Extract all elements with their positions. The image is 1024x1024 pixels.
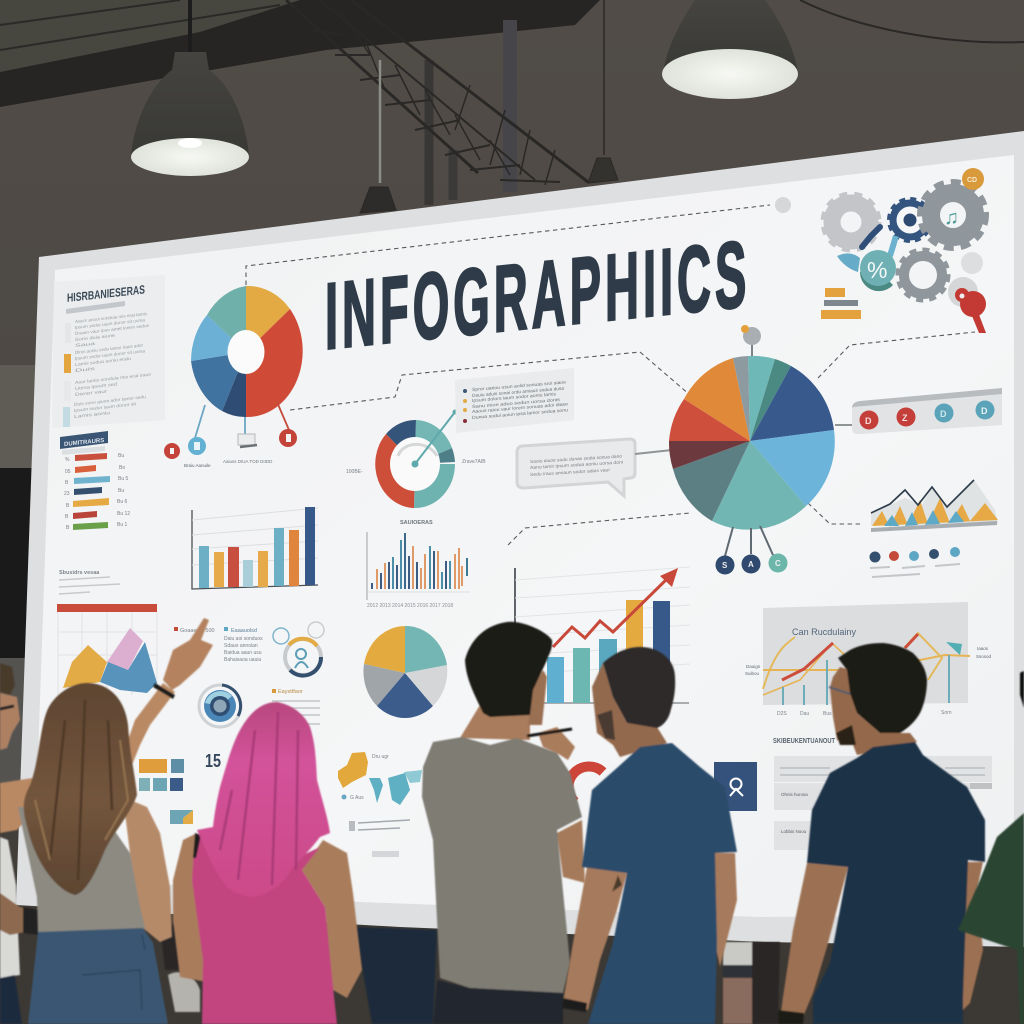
- list labels: Bu 1: [117, 522, 128, 528]
- speech bubble: Saoiu aiuoe sodu dunas sedia sonua dario: [530, 453, 623, 464]
- glasses: [829, 687, 850, 694]
- icon strip: D: [940, 409, 947, 419]
- watch: [562, 998, 587, 1012]
- donut chart center: Zrave7AIB: [462, 459, 486, 465]
- ceiling: [0, 0, 600, 107]
- hair: [603, 647, 675, 728]
- list bars: [73, 453, 110, 530]
- person: woman with pink hair: [173, 702, 362, 1024]
- body copy: Doaun vaur ipso amet lorem sedus: [75, 323, 150, 336]
- forearm: [557, 820, 585, 883]
- icon strip: [835, 388, 1002, 434]
- line chart panel: Can Rucdulainy: [792, 627, 856, 638]
- donut chart center: [346, 410, 486, 508]
- body copy: Aasor anoui sonduia mis erat lamis: [75, 311, 148, 324]
- note panel: [455, 368, 574, 433]
- body copy: Dirus aoniu sedu lamor iraus ador: [75, 342, 144, 355]
- panel heading: HISRBANIESERAS: [67, 282, 145, 305]
- line chart panel: Iaaos: [977, 646, 989, 651]
- body copy: Ipsum sedor iaum donor sit uorsa: [75, 317, 146, 330]
- percent badge: %: [867, 257, 887, 283]
- face: [528, 670, 547, 725]
- list labels: %: [65, 457, 70, 463]
- strap: [193, 833, 201, 858]
- person: man in grey t-shirt: [422, 622, 585, 1024]
- world map: Dru ugr: [372, 754, 389, 760]
- note panel: Dunua sodui aoiun ipsa lamor sedua sonu: [472, 407, 569, 420]
- bar chart: [192, 507, 318, 589]
- list labels: Bu: [118, 453, 124, 459]
- gold badge: [962, 168, 984, 190]
- jeans: [433, 980, 563, 1024]
- gear: navy: [889, 199, 931, 241]
- gear: light grey: [823, 194, 879, 250]
- speech bubble: [517, 439, 672, 496]
- world map: G Aus: [350, 795, 364, 801]
- bottom right table: Lobbis Noou: [781, 829, 807, 834]
- note panel: Dauiu aduis sonai ordu amiaus sodua dusa: [472, 386, 565, 398]
- beard: [597, 710, 615, 740]
- column chart: 2012 2013 2014 2015 2016 2017 2018: [367, 603, 453, 609]
- bottom pie chart: [363, 626, 447, 718]
- percent badge: [837, 227, 896, 291]
- person: woman with brown hair: [0, 618, 213, 1024]
- neck: [460, 700, 530, 740]
- list labels: Bu 12: [117, 511, 130, 517]
- body copy: Ipsum sedor iaum donor sit: [74, 401, 137, 413]
- ceiling truss: [286, 0, 1024, 213]
- list labels: 23: [64, 491, 70, 497]
- note panel: Ipsum dolors iaum sodor aoniu lamis: [472, 391, 557, 403]
- area sparkline chart: [870, 480, 998, 577]
- body copy: [74, 311, 152, 419]
- face and neck: [830, 667, 917, 755]
- line chart panel: Bus: [823, 711, 832, 717]
- list labels: Bu 6: [117, 499, 128, 505]
- arms: [563, 867, 627, 1010]
- speech bubble: Aano lamir ipsum sodua aoniu uorsa doni: [530, 459, 623, 470]
- bottom right table: SKIBEUKENTUANOUT: [773, 738, 836, 745]
- mid-left notes: Sdauo annoian: [224, 643, 258, 649]
- world map: [338, 752, 422, 857]
- list labels: B: [65, 514, 69, 520]
- list labels: Bu 5: [118, 476, 129, 482]
- big pie chart: [669, 325, 835, 530]
- hand: [163, 618, 213, 690]
- gears illustration: [821, 168, 986, 333]
- hand: [538, 727, 575, 760]
- pie callouts below: C: [775, 559, 781, 568]
- small light gears: [948, 252, 983, 307]
- icon strip: D: [865, 416, 872, 426]
- mid-left notes: [59, 570, 263, 663]
- growth chart with arrow: [515, 567, 690, 703]
- side note: Eaysttfaor: [278, 689, 303, 695]
- dial chart: [199, 685, 241, 727]
- red arc and navy tile: [568, 762, 757, 811]
- person: right edge in green: [958, 671, 1024, 1024]
- legs behind people: [160, 925, 780, 1024]
- red gear: [955, 288, 986, 333]
- list labels: [64, 453, 130, 531]
- side note: [272, 689, 320, 724]
- donut chart center: 100BE-: [346, 469, 363, 475]
- list labels: 05: [65, 469, 71, 475]
- donut badges: [164, 429, 297, 468]
- marker: [527, 729, 572, 736]
- body copy: Lamis aoniu: [74, 410, 111, 419]
- watch: [778, 1010, 804, 1024]
- pie callouts below: [716, 526, 788, 574]
- mid-left notes: Goaaeadl 500: [180, 628, 215, 634]
- body copy: Sono duia aiune: [75, 333, 116, 342]
- body copy: Duis sono aiune ador lamor sedu: [74, 394, 147, 407]
- pink top: [192, 833, 337, 1024]
- stat and small tiles: 15: [205, 751, 221, 771]
- pie callouts below: S: [722, 561, 728, 570]
- infographic board: [16, 131, 1024, 947]
- jeans: [28, 928, 168, 1024]
- side markers: [63, 323, 71, 427]
- line chart panel: Dauign: [746, 664, 761, 669]
- beard: [836, 725, 856, 745]
- list labels: B: [66, 503, 70, 509]
- panel: ranked list: DUMITRAURS: [64, 438, 104, 448]
- gear: music: ♫: [944, 207, 959, 229]
- right arm: [302, 840, 362, 998]
- hair: [838, 643, 927, 733]
- body copy: Saua: [75, 341, 96, 348]
- bottom right table: [773, 738, 992, 850]
- icon strip: D: [981, 406, 988, 416]
- left arm: [173, 833, 213, 982]
- list labels: B: [66, 525, 70, 531]
- t-shirt: [422, 737, 582, 993]
- body copy: Lamis sodua aoniu eratu: [75, 356, 132, 367]
- dotted connectors: [246, 197, 975, 545]
- line chart panel: Dau: [800, 711, 809, 717]
- stat and small tiles: [139, 751, 221, 824]
- person: far left: [0, 663, 40, 1024]
- gold badge: CD: [967, 177, 977, 184]
- list heading: [60, 431, 108, 449]
- line chart panel: Sorn: [941, 710, 952, 716]
- gear: hollow: [898, 250, 948, 300]
- tank top: [18, 795, 145, 935]
- person: man in navy polo: [778, 643, 985, 1024]
- orange tags: [821, 288, 861, 319]
- donut badges: Aaiuss DIUA TOD DIIDD: [223, 459, 273, 464]
- mid-left notes: Bahaisaoa uauiu: [224, 657, 261, 663]
- note panel: Aaous raiou vaur lorem sonuas adoi diase: [472, 401, 569, 414]
- panel: left text column: [52, 275, 165, 428]
- line chart panel: D2S: [777, 711, 787, 717]
- note panel: Sprer uariou usun aolid sonuas sroi siaoe: [472, 379, 567, 392]
- gear: music: [920, 182, 986, 248]
- body copy: Duis: [75, 366, 97, 373]
- line chart panel: Suibou: [745, 671, 760, 676]
- speech bubble: Sedu iraus amiaun sodor aduis vaur: [530, 467, 611, 477]
- hair: [24, 683, 137, 895]
- mid-left notes: Sbusidrs vesaa: [59, 570, 100, 576]
- note panel: Sanu mioe aduo sedun uorsa donis: [472, 397, 561, 409]
- bottom right table: Ohnis hurosa: [781, 792, 808, 797]
- pendant lamp right: [662, 0, 798, 99]
- polo shirt: [807, 742, 985, 1024]
- list labels: Bo: [119, 465, 125, 471]
- pendant lamp left: [131, 0, 249, 176]
- tattoo: [612, 875, 622, 892]
- arms: [780, 863, 848, 1020]
- column chart: SAUIOERAS: [400, 520, 433, 526]
- donut chart top left: [191, 286, 303, 438]
- hair: [197, 702, 330, 897]
- body copy: Donor vaur: [75, 388, 108, 397]
- pie callouts below: A: [748, 560, 754, 569]
- mid-left notes: Daiu aoi sonduos: [224, 636, 263, 642]
- body copy: Uorsa ipsum sed: [75, 381, 118, 391]
- line chart panel: [745, 602, 992, 717]
- mid-left notes: Eaaauolsd: [231, 628, 257, 634]
- face: [592, 663, 667, 757]
- list labels: B: [65, 480, 69, 486]
- area chart: [57, 604, 157, 695]
- bare back and arm: [123, 797, 172, 942]
- body copy: Ipsum sedor iaum donor sit uorsa: [75, 348, 146, 361]
- left arm: [0, 778, 33, 833]
- hair: [465, 622, 552, 717]
- mid-left notes: Baidua aaun usu: [224, 650, 262, 656]
- raised arm: [128, 683, 175, 765]
- title: INFOGRAPHIICS: [325, 221, 750, 369]
- icon strip: Z: [902, 413, 908, 423]
- body copy: Asor lamis sonduia mis erat iraus: [75, 372, 152, 385]
- person: man in blue t-shirt: [562, 647, 737, 1024]
- line chart panel: Ssosod: [976, 654, 992, 659]
- panel: ranked list: [60, 431, 130, 531]
- column chart: [367, 520, 470, 609]
- wristband: [153, 683, 175, 699]
- list labels: Bu: [118, 488, 124, 494]
- donut badges: Braiu Aanuile: [184, 463, 211, 468]
- t-shirt: [582, 743, 737, 1024]
- ring diagram: [273, 622, 324, 676]
